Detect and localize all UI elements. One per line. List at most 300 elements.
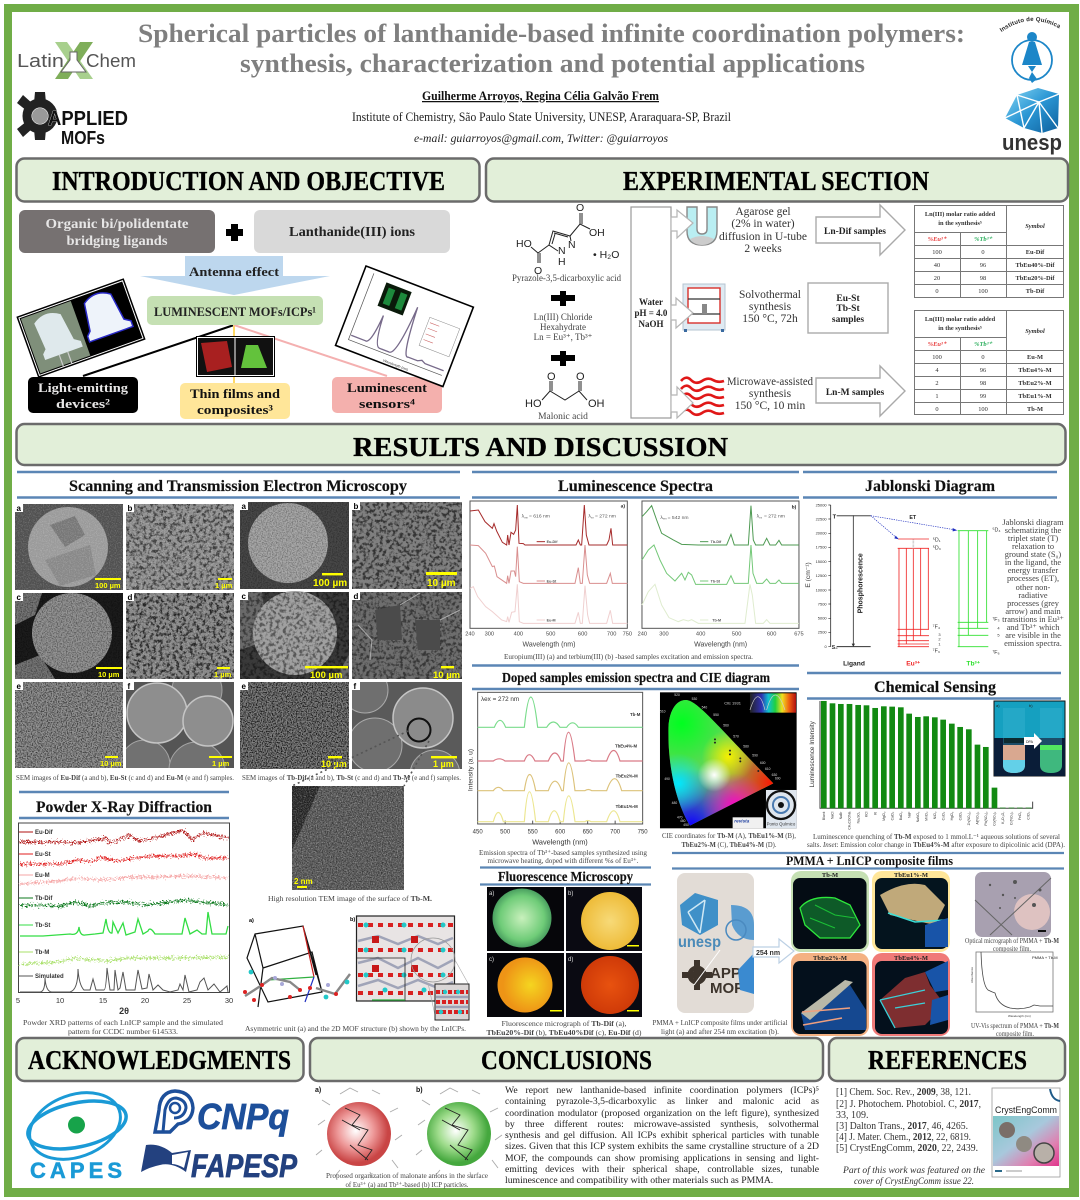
image: Eu-Dif b: b <box>128 504 132 513</box>
text: conclusions paragraph: luminescence and compatibility with other materials such as PMMA. <box>505 1175 773 1186</box>
text: agarose gel: 2 weeks <box>744 243 782 255</box>
image: Eu-Dif a <box>15 504 123 590</box>
caption: PMMA photo <box>652 1018 788 1036</box>
heading: results and discussion <box>16 424 1066 465</box>
chart: doped emission spectra: 700 <box>610 830 621 836</box>
image: film TbEu2% <box>791 953 869 1036</box>
chart: Eu spectra: Eu-St <box>547 579 557 583</box>
text: solvothermal: 150 °C, 72h <box>742 313 798 325</box>
text: microwave-assisted: synthesis <box>749 388 792 400</box>
image: fluorescence b <box>566 887 642 951</box>
image: fluorescence a: a) <box>489 891 494 897</box>
table: microwave samples: in the synthesis⁵ <box>938 325 982 332</box>
chart: luminescence quenching bars: NaNO₃ <box>916 811 920 822</box>
image: DPA colour change inset: b) <box>1029 703 1033 708</box>
image: Eu-St d <box>126 593 234 679</box>
chart: Tb spectra: 500 <box>732 631 741 637</box>
note: cover feature: Part of this work was featured on the <box>842 1165 985 1176</box>
image: DPA colour change inset <box>994 701 1065 776</box>
logo: Applied MOFs: APPLIED <box>48 108 128 130</box>
text: agarose gel: Agarose gel <box>735 206 791 218</box>
image: Eu-Dif a: 100 µm <box>95 581 121 590</box>
heading: acknowledgments <box>16 1038 304 1081</box>
chart: XRD patterns: 15 <box>99 996 107 1005</box>
chart: XRD patterns: 2θ <box>119 1006 129 1016</box>
structure: 2D MOF <box>350 916 469 1020</box>
structure: pyrazole-3,5-dicarboxylic acid: O <box>534 265 542 277</box>
text: conclusions paragraph: emitting devices with their spherical shape, controllable sizes, tunable <box>505 1164 819 1175</box>
text: solvothermal: Solvothermal <box>739 289 801 301</box>
logo: FAPESP: FAPESP <box>191 1148 298 1184</box>
chart: energy levels: 17500 <box>816 545 827 550</box>
table: Dif samples: 20 <box>934 275 940 282</box>
arrow: antenna effect: Antenna effect <box>189 264 280 279</box>
chart: luminescence quenching bars: K₂Cr₂O₇ <box>1001 811 1005 824</box>
structure: malonic acid <box>525 371 605 410</box>
chart: luminescence quenching bars: MgCl₂ <box>882 811 886 821</box>
chart: CIE diagram: 630 <box>772 773 777 777</box>
chart: CIE diagram: 570 <box>733 734 739 738</box>
luminescent MOFs box <box>147 296 323 325</box>
text: Jablonski description: triplet state (T) <box>1008 534 1058 543</box>
image: Eu-St d: 1 µm <box>214 670 232 679</box>
caption: malonate organization <box>326 1171 489 1189</box>
chart: Tb spectra: ex <box>759 516 763 519</box>
reference list: [5] CrystEngComm, 2020, 22, 2439. <box>836 1143 978 1154</box>
chart: energy levels: ⁵D₁ <box>933 538 941 544</box>
image: journal cover: CrystEngComm <box>995 1105 1057 1115</box>
text: Jablonski description: are visible in the <box>1005 631 1061 640</box>
logo: CAPES <box>20 1081 130 1183</box>
text: agarose gel: diffusion in U-tube <box>719 231 807 243</box>
text: microwave-assisted <box>727 376 813 412</box>
reference list: [2] J. Photochem. Photobiol. C, 2017, <box>836 1099 981 1110</box>
heading: chemical sensing: Chemical Sensing <box>874 679 996 696</box>
arrow: 254 nm: 254 nm <box>756 950 780 957</box>
heading: introduction: INTRODUCTION AND OBJECTIVE <box>52 166 445 196</box>
structure: pyrazole-3,5-dicarboxylic acid: N <box>568 239 576 251</box>
table: microwave samples: TbEu2%-M <box>1018 380 1052 387</box>
text: Jablonski description: and Tb³⁺ which <box>1007 623 1060 632</box>
chart: energy levels: ⁷F₀ <box>933 648 940 654</box>
contact: e-mail: guiarroyos@gmail.com, Twitter: @guiarroyos <box>414 131 668 145</box>
panel: PMMA composite films <box>652 853 1064 1038</box>
image: fluorescence c <box>487 953 564 1017</box>
image: Tb-St c: 100 µm <box>310 670 342 681</box>
water reservoir box: pH = 4.0 <box>635 308 668 318</box>
logo: LatinXChem <box>17 42 136 79</box>
chart: Eu spectra: em <box>524 516 529 519</box>
caption: XRD: Powder XRD patterns of each LnICP sample and the simulated <box>23 1018 223 1027</box>
arrow: to U-tube <box>671 210 693 238</box>
text: Jablonski description: radiative <box>1018 591 1048 600</box>
chart: Eu spectra: = 272 nm <box>595 514 616 520</box>
chart: luminescence quenching bars: Blank <box>822 811 826 820</box>
water reservoir box: NaOH <box>638 319 664 329</box>
chart: Eu spectra: Eu-M <box>547 618 556 622</box>
caption: UV-Vis <box>971 1021 1059 1038</box>
chart: XRD patterns: Tb-Dif <box>35 896 53 902</box>
chart: XRD patterns <box>16 823 233 1016</box>
chart: Tb spectra: 675 <box>794 631 804 637</box>
water reservoir box <box>631 207 671 418</box>
image: PMMA photo <box>677 873 754 1013</box>
chart: UV-Vis spectrum: PMMA + Tb-M <box>1032 955 1058 960</box>
zoom lines: surface to TEM <box>292 731 429 786</box>
panel: Jablonski diagram <box>803 472 1064 668</box>
text: Jablonski description: ground state (S₀) <box>1005 550 1061 559</box>
chart: doped emission spectra: Intensity (a. u) <box>467 749 474 791</box>
chart: CIE diagram: 610 <box>765 767 771 771</box>
chart: doped emission spectra: Wavelength (nm) <box>532 837 588 846</box>
arrow: to oven <box>671 298 693 328</box>
image: DPA colour change inset: a) <box>996 703 1000 708</box>
chart: luminescence quenching bars: CrCl₃ <box>1027 811 1031 820</box>
arrow: Ln-Dif samples: Ln-Dif samples <box>824 227 886 237</box>
logo: FAPESP <box>141 1145 298 1184</box>
structure: malonic acid: OH <box>588 398 605 410</box>
chart: luminescence quenching bars: CaCl₂ <box>890 811 894 820</box>
caption: UV-Vis: composite film. <box>996 1029 1034 1038</box>
organic ligands box: Organic bi/polidentate <box>46 216 188 231</box>
lanthanide box <box>254 210 450 253</box>
chart: luminescence quenching bars: Luminescence Intensity <box>809 720 816 787</box>
chart: Tb spectra: 300 <box>659 631 669 637</box>
label: Ln chloride: Ln(III) Chloride <box>534 312 592 322</box>
panel: fluorescence microscopy <box>480 868 651 1037</box>
table: Dif samples: TbEu40%-Dif <box>1015 262 1055 269</box>
text: microwave-assisted: 150 °C, 10 min <box>735 400 805 412</box>
structure: pyrazole-3,5-dicarboxylic acid: HO <box>516 238 532 250</box>
chart: CIE diagram: 530 <box>692 697 697 701</box>
caption: PMMA photo: light (a) and after 254 nm excitation (b). <box>661 1027 779 1036</box>
caption: luminescence: Europium(III) (a) and terbium(III) (b) -based samples excitation and emission spectra. <box>504 652 753 661</box>
chart: Tb spectra: 240 <box>638 631 647 637</box>
chart: CIE diagram: 560 <box>723 724 729 728</box>
caption: Tb SEM: SEM images of Tb-Dif (a and b), Tb-St (c and d) and Tb-M (e and f) samples. <box>242 773 461 782</box>
text: conclusions paragraph: We report new lanthanide-based infinite coordination polymers (ICPs)⁵ <box>505 1085 819 1096</box>
image: Tb-Dif b: b <box>354 502 358 511</box>
chart: doped emission spectra: 600 <box>555 830 566 836</box>
table: microwave samples: Tb-M <box>1027 406 1043 413</box>
caption: optical micrograph: composite film. <box>993 944 1031 953</box>
panel: electron microscopy <box>15 472 469 1033</box>
text: Jablonski description: emission spectra. <box>1004 639 1062 648</box>
table: microwave samples: %Tb³⁺ <box>974 341 992 348</box>
organic ligands box: bridging ligands <box>66 233 168 248</box>
chart: Eu spectra: ex <box>591 516 594 519</box>
chart: UV-Vis spectrum: Absorbance <box>970 967 974 983</box>
image: Tb-St c: c <box>242 592 246 601</box>
chart: XRD patterns: Eu-Dif <box>35 830 54 836</box>
chart: luminescence quenching bars: Pb(NO₃)₂ <box>984 811 988 826</box>
chart: XRD patterns: Tb-M <box>35 950 49 956</box>
caption: TEM: High resolution TEM image of the surface of Tb-M. <box>268 894 432 903</box>
table: Dif samples: %Tb³⁺ <box>974 236 992 243</box>
box: Eu-St Tb-St samples: Eu-St <box>836 294 860 304</box>
chart: Eu spectra: 500 <box>546 631 555 637</box>
table: Dif samples: 96 <box>980 262 986 269</box>
chart: CIE diagram: 460 <box>680 819 686 823</box>
caption: CIE: TbEu2%-M (C), TbEu4%-M (D). <box>682 840 777 849</box>
arrow: Ln-M samples: Ln-M samples <box>826 388 884 398</box>
chart: energy levels: ⁵D₀ <box>933 546 941 552</box>
chart: doped emission spectra: TbEu2%-M <box>616 773 638 778</box>
label: Ln chloride: Ln = Eu³⁺, Tb³⁺ <box>534 332 593 342</box>
box: Eu-St Tb-St samples <box>808 283 888 333</box>
heading: introduction <box>16 158 480 202</box>
image: fluorescence a <box>487 887 564 951</box>
thin films box <box>180 383 290 419</box>
structure: asymmetric unit: a) <box>249 918 254 924</box>
text: Jablonski description: energy transfer <box>1008 566 1058 575</box>
arrow: 254 nm <box>753 939 794 963</box>
panel: introduction and objective <box>16 158 480 419</box>
table: Dif samples: 100 <box>932 249 942 256</box>
chart: energy levels: ⁷F₆ <box>992 650 1000 656</box>
arrow: to microwaves <box>671 387 693 418</box>
chart: energy levels: 2 <box>938 637 941 642</box>
heading: experimental: EXPERIMENTAL SECTION <box>623 166 929 196</box>
chart: luminescence quenching bars: Co(NO₃)₂ <box>993 811 997 826</box>
caption: fluorescence <box>486 1019 642 1037</box>
image: Eu-St c <box>15 593 123 679</box>
reference list: [4] J. Mater. Chem., 2012, 22, 6819. <box>836 1132 971 1143</box>
chart: CIE diagram: CIE 1931 <box>724 701 742 706</box>
panel: references <box>829 1038 1065 1187</box>
logo: UNESP <box>1002 88 1062 155</box>
table: Dif samples: in the synthesis⁵ <box>938 220 982 227</box>
chart: CIE diagram: 590 <box>752 754 758 758</box>
image: Tb-M e: e <box>242 682 246 691</box>
text: Jablonski description: relaxation to <box>1012 542 1054 551</box>
table: microwave samples: TbEu4%-M <box>1018 367 1052 374</box>
chart: CIE diagram: 480 <box>672 801 677 805</box>
image: Eu-M e <box>15 682 123 768</box>
heading: references: REFERENCES <box>868 1045 1027 1075</box>
chart: energy levels: T <box>833 514 837 520</box>
text: Jablonski description: processes (ET), <box>1007 574 1059 583</box>
caption: optical micrograph <box>965 936 1059 953</box>
heading: experimental <box>486 158 1068 202</box>
text: Jablonski description: processes (grey <box>1007 599 1060 608</box>
chart: doped emission spectra: Tb-M <box>630 712 641 717</box>
table: Dif samples: TbEu20%-Dif <box>1015 275 1055 282</box>
table: Dif samples: 40 <box>934 262 940 269</box>
chart: energy levels: 20000 <box>816 531 827 536</box>
text: conclusions paragraph: coordination modulator (proposed organization on the left figure), synthesized <box>505 1108 819 1118</box>
icon: oven <box>683 284 725 332</box>
chart: Tb spectra: Tb-M <box>712 618 721 622</box>
heading: chemical sensing <box>807 673 1061 698</box>
chart: energy levels: 1 <box>938 641 941 646</box>
title <box>138 19 965 78</box>
caption: structures: Asymmetric unit (a) and the 2D MOF structure (b) shown by the LnICPs. <box>245 1024 466 1033</box>
text: Jablonski description: Jablonski diagram <box>1002 518 1064 527</box>
image: PMMA photo: MOF <box>710 980 743 997</box>
structure: asymmetric unit <box>243 918 350 1007</box>
reference list: [1] Chem. Soc. Rev., 2009, 38, 121. <box>836 1087 971 1098</box>
text: conclusions paragraph: sizes. Given that this ICP system exhibits the same crystalline structure of a 2D <box>505 1141 819 1152</box>
chart: energy levels: Tb³⁺ <box>966 661 981 668</box>
image: TEM: 2 nm <box>294 877 313 886</box>
chart: luminescence quenching bars: KI <box>873 812 877 815</box>
table: microwave samples <box>914 310 1064 414</box>
chart: doped emission spectra <box>467 692 648 846</box>
chart: CIE diagram: 550 <box>713 713 719 717</box>
logo: CNPq <box>155 1091 289 1137</box>
chart: XRD patterns: Eu-M <box>35 873 50 879</box>
chart: Eu spectra: = 616 nm <box>529 514 550 520</box>
chart: Tb spectra: Tb-St <box>711 579 721 583</box>
image: Tb-M e: 10 µm <box>321 759 347 769</box>
table: microwave samples: 2 <box>935 380 939 387</box>
chart: CIE diagram: 510 <box>660 710 666 714</box>
chart: energy levels: 5 <box>997 633 1000 638</box>
text: microwave-assisted: Microwave-assisted <box>727 376 813 388</box>
chart: Tb spectra: = 542 nm <box>668 515 689 521</box>
panel: experimental section <box>486 158 1068 422</box>
logo: CNPq: CNPq <box>197 1096 289 1137</box>
chart: energy levels <box>805 502 1001 668</box>
heading: luminescence <box>472 472 799 498</box>
chart: Eu spectra: 400 <box>514 631 523 637</box>
chart: luminescence quenching bars: BaCl₂ <box>899 811 903 820</box>
image: sensor spectrum <box>336 266 473 387</box>
text: Jablonski description: arrow) and main <box>1005 607 1061 616</box>
chart: CIE diagram: 600 <box>760 761 766 765</box>
connector lines <box>83 325 387 385</box>
chart: energy levels: ⁷F₄ <box>933 624 940 630</box>
text: solvothermal: synthesis <box>749 301 792 313</box>
chart: XRD patterns: 5 <box>16 996 20 1005</box>
chart: Tb spectra: 400 <box>696 631 705 637</box>
chart: energy levels: 15000 <box>816 559 827 564</box>
chart: doped emission spectra: 750 <box>638 830 648 836</box>
image: fluorescence b: b) <box>568 891 573 897</box>
image: fluorescence d <box>566 953 642 1017</box>
table: microwave samples: 4 <box>935 367 939 374</box>
icon: plus <box>551 291 575 306</box>
chart: energy levels: E (cm⁻¹) <box>805 562 812 588</box>
heading: PMMA <box>672 853 1064 868</box>
chart: XRD patterns: Simulated <box>35 974 64 980</box>
text: conclusions paragraph: by three different routes: microwave-assisted synthesis, solvothermal <box>505 1119 819 1130</box>
table: microwave samples: %Eu³⁺ <box>928 341 947 348</box>
caption: doped spectra: Emission spectra of Tb³⁺-based samples synthesized using <box>479 848 647 857</box>
caption: CIE <box>662 831 796 849</box>
chart: luminescence quenching bars: NaBr <box>839 811 843 819</box>
chart: UV-Vis spectrum: Wavelength (nm) <box>1008 1014 1031 1018</box>
table: Dif samples <box>914 206 1064 298</box>
heading: conclusions: CONCLUSIONS <box>481 1045 652 1075</box>
chart: Eu spectra: a) <box>621 504 625 510</box>
logo: UNESP: unesp <box>1002 130 1062 155</box>
table: Dif samples: 0 <box>981 249 985 256</box>
chart: energy levels: Phosphorescence <box>858 553 865 613</box>
chart: doped emission spectra: TbEu4%-M <box>615 743 638 748</box>
table: microwave samples: 0 <box>981 354 985 361</box>
chart: luminescence quenching bars: Al(NO₃)₃ <box>976 811 980 825</box>
structure: pyrazole-3,5-dicarboxylic acid: OH <box>589 227 605 239</box>
chart: XRD patterns: 20 <box>141 996 149 1005</box>
heading: luminescence: Luminescence Spectra <box>558 478 713 495</box>
text: agarose gel <box>719 206 807 255</box>
chart: luminescence quenching bars: Cr(NO₃)₃ <box>1010 811 1014 825</box>
chart: luminescence quenching bars: HgCl₂ <box>950 811 954 820</box>
chart: energy levels: ⁷F₃ <box>992 617 1000 623</box>
figure: Tb particle <box>416 1087 502 1178</box>
light-emitting devices box <box>28 377 138 413</box>
label: Ln chloride <box>534 312 593 342</box>
table: microwave samples: 98 <box>980 380 986 387</box>
caption: malonate organization: Proposed organization of malonate anions in the surface <box>326 1171 489 1180</box>
chart: energy levels: 7500 <box>818 601 827 606</box>
panel: chemical sensing <box>807 673 1065 849</box>
image: Tb-Dif b <box>352 502 462 589</box>
heading: acknowledgments: ACKNOWLEDGMENTS <box>28 1045 291 1075</box>
table: Dif samples: Symbol <box>1025 223 1045 230</box>
chart: doped emission spectra: 650 <box>583 830 593 836</box>
caption: doped spectra <box>479 848 647 865</box>
caption: doped spectra: microwave heating, doped with different %s of Eu³⁺. <box>488 856 639 865</box>
chart: XRD patterns: Eu-St <box>35 852 51 858</box>
reference list: [3] Dalton Trans., 2017, 46, 4265. <box>836 1121 968 1132</box>
structure: malonic acid: O <box>547 371 556 383</box>
table: microwave samples: Eu-M <box>1027 354 1043 361</box>
table: microwave samples: 100 <box>978 406 988 413</box>
chart: energy levels: 10000 <box>816 587 827 592</box>
chart: luminescence quenching bars: Zn(NO₃)₂ <box>967 811 971 825</box>
chart: energy levels: 0 <box>824 644 827 649</box>
table: microwave samples: 0 <box>935 406 939 413</box>
chart: energy levels: ⁵D₄ <box>992 528 1001 534</box>
heading: doped samples: Doped samples emission spectra and CIE diagram <box>502 671 770 686</box>
chart: energy levels: 4 <box>997 626 1000 631</box>
chart: luminescence quenching bars: CuCl₂ <box>941 811 945 820</box>
icon: U-tube <box>687 207 717 245</box>
thin films box: Thin films and <box>190 386 281 401</box>
chart: Eu spectra <box>465 501 632 649</box>
image: Tb-St d <box>352 592 462 681</box>
chart: Tb spectra: em <box>663 518 667 521</box>
image: Tb-Dif a <box>240 502 349 589</box>
chart: CIE diagram: 580 <box>743 744 749 748</box>
table: Dif samples: 100 <box>978 288 988 295</box>
chart: luminescence quenching bars <box>809 701 1033 830</box>
heading: XRD: Powder X-Ray Diffraction <box>36 799 212 816</box>
image: PMMA photo: unesp <box>678 934 721 951</box>
chart: Tb spectra: λ <box>757 514 760 520</box>
label: pyrazole: Pyrazole-3,5-dicarboxylic acid <box>512 274 621 284</box>
chart: Eu spectra: Eu-Dif <box>547 540 558 544</box>
chart: CIE diagram: 470 <box>677 815 683 819</box>
chart: Eu spectra: λ <box>588 514 591 520</box>
chart: CIE diagram: Ponto Químico <box>767 822 796 827</box>
luminescent sensors box: sensors⁴ <box>359 396 415 411</box>
chart: doped emission spectra: TbEu1%-M <box>616 804 638 809</box>
chart: CIE diagram: 690 <box>775 776 781 780</box>
text: conclusions paragraph: synthesis and gel diffusion. All ICPs exhibit spherical particles with tunable <box>505 1130 819 1141</box>
chart: XRD patterns: Tb-St <box>35 923 50 929</box>
structure: malonic acid: O <box>576 371 585 383</box>
light-emitting devices box: Light-emitting <box>38 380 129 395</box>
chart: Eu spectra: 240 <box>465 631 475 637</box>
chart: energy levels: Eu³⁺ <box>906 661 921 668</box>
poster header <box>17 16 1062 155</box>
chart: Tb spectra: = 272 nm <box>764 514 785 520</box>
table: Dif samples: Ln(III) molar ratio added <box>925 211 996 218</box>
